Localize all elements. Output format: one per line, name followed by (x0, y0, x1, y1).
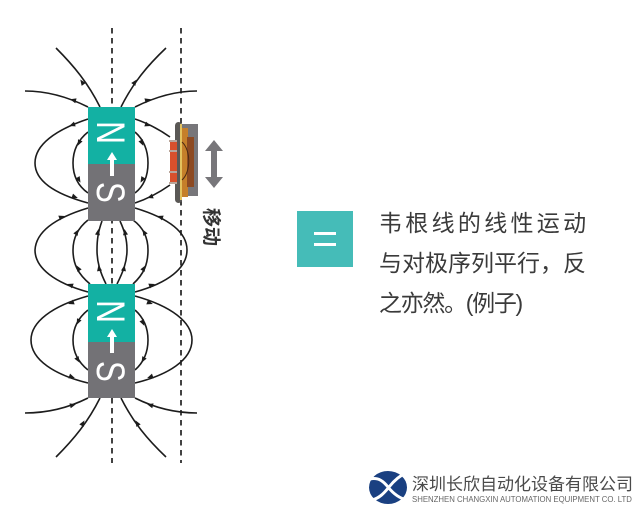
field line arrowheads (58, 78, 164, 427)
description text (379, 210, 589, 316)
movement label: 移动 (200, 208, 222, 246)
line one: 韦根线的线性运动 (379, 210, 589, 236)
top magnet (88, 107, 135, 221)
south label: S (88, 361, 133, 382)
company name (412, 475, 633, 504)
line two: 与对极序列平行，反 (379, 250, 586, 276)
chinese name: 深圳长欣自动化设备有限公司 (412, 475, 633, 494)
polarity arrow (107, 329, 117, 353)
movement double arrow (205, 140, 223, 188)
wiegand sensor coil (169, 122, 198, 203)
equals icon (297, 211, 353, 267)
english name: SHENZHEN CHANGXIN AUTOMATION EQUIPMENT CO. LTD (412, 495, 632, 504)
polarity arrow (107, 152, 117, 176)
south label: S (88, 182, 133, 203)
north label: N (88, 121, 133, 144)
field lines (25, 48, 197, 457)
north label: N (88, 300, 133, 323)
line three: 之亦然。(例子) (379, 290, 522, 316)
dashed axis lines (112, 28, 181, 463)
bottom magnet (88, 284, 135, 398)
company logo mark (369, 471, 407, 504)
